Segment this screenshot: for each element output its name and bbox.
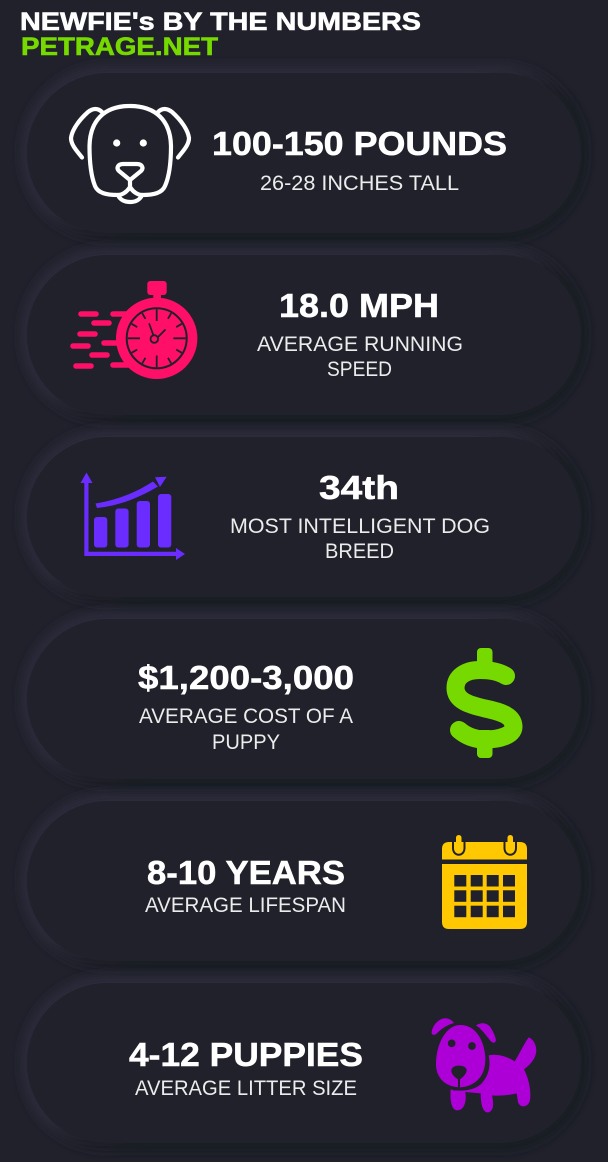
stat label: cost: AVERAGE COST OF A — [139, 704, 354, 728]
icon: stopwatch — [73, 281, 197, 379]
stat label: intelligence: MOST INTELLIGENT DOG — [230, 514, 490, 538]
stat label: speed — [257, 332, 463, 381]
panel: running speed — [21, 247, 587, 423]
stat: cost: $1,200-3,000 — [138, 659, 354, 696]
icon: purple puppy — [432, 1018, 536, 1112]
title: PETRAGE.NET — [21, 33, 218, 61]
title — [20, 8, 421, 61]
stat label: lifespan: AVERAGE LIFESPAN — [145, 893, 346, 917]
stat label: height: 26-28 INCHES TALL — [260, 171, 459, 195]
stat label: speed: AVERAGE RUNNING — [257, 332, 463, 356]
stat: rank: 34th — [319, 469, 399, 506]
stat: speed: 18.0 MPH — [279, 287, 439, 324]
stat label: intelligence — [230, 514, 490, 563]
title: NEWFIE's BY THE NUMBERS — [20, 8, 421, 36]
stat label: intelligence: BREED — [325, 539, 394, 563]
stat: litter: 4-12 PUPPIES — [129, 1036, 363, 1073]
stat: weight: 100-150 POUNDS — [212, 125, 507, 162]
icon: calendar — [442, 835, 527, 929]
panel: weight and height — [21, 65, 587, 241]
panel: intelligence — [21, 429, 587, 605]
icon: rising bar chart — [80, 472, 185, 560]
icon: dollar sign — [456, 648, 514, 758]
panel: litter size — [21, 975, 587, 1151]
stat label: cost: PUPPY — [212, 730, 280, 754]
panel: cost — [21, 611, 587, 787]
stat label: cost — [139, 704, 354, 754]
icon: dog face outline — [71, 106, 189, 202]
panel: lifespan — [21, 793, 587, 969]
stat: lifespan: 8-10 YEARS — [147, 854, 345, 891]
stat label: speed: SPEED — [327, 357, 392, 381]
stat label: litter: AVERAGE LITTER SIZE — [135, 1076, 357, 1100]
